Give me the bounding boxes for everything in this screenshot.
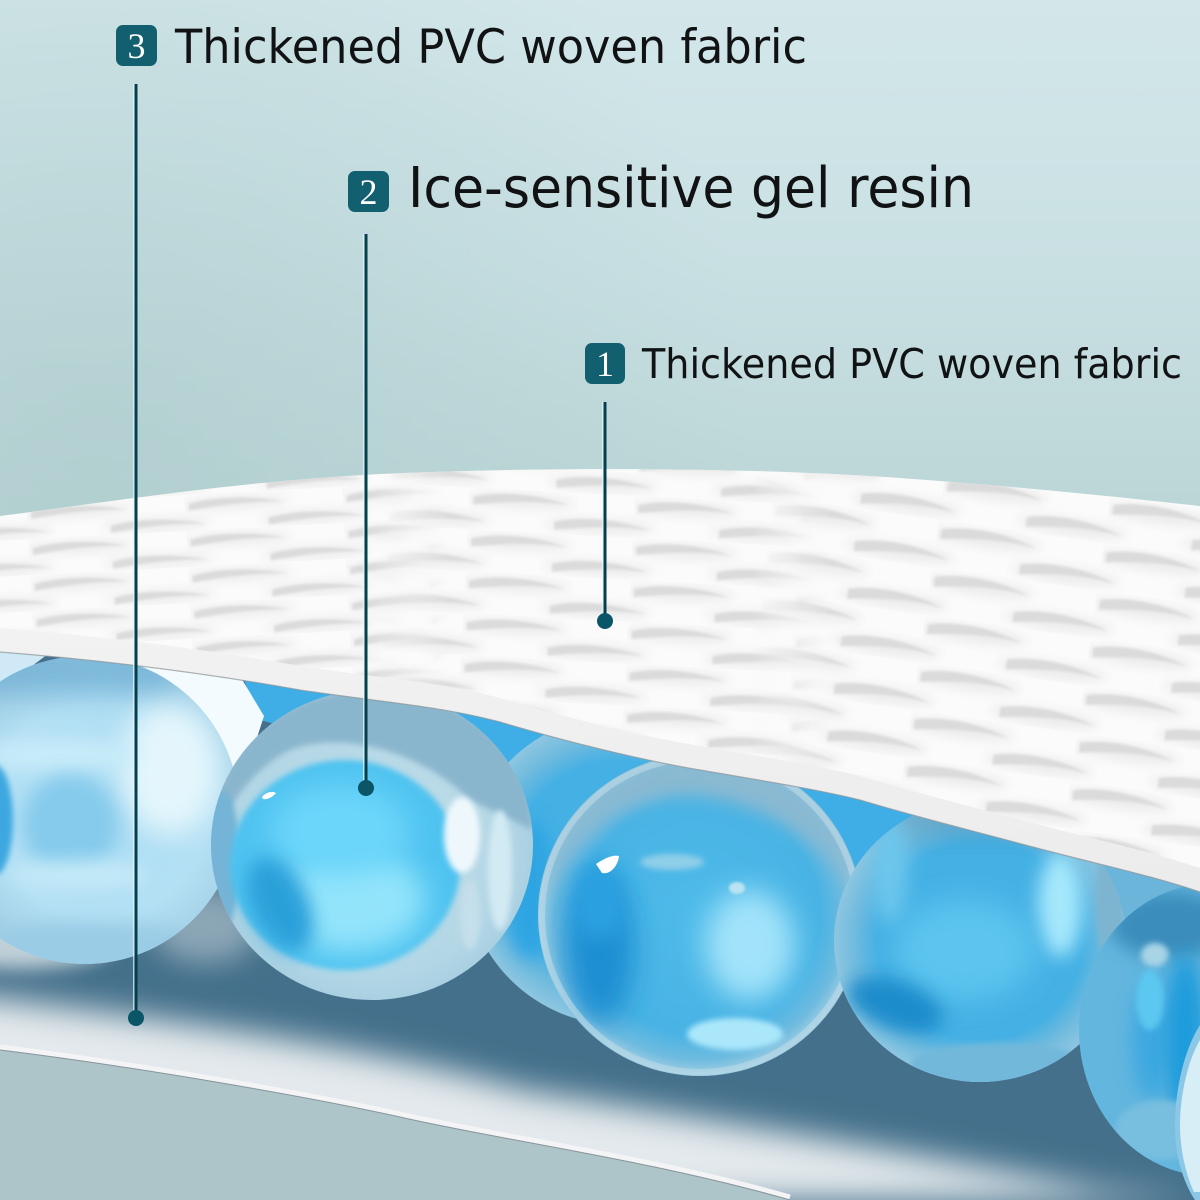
- upper fabric layer: [0, 440, 1200, 900]
- gel bead: far right: [1079, 884, 1200, 1176]
- badge 1: [585, 343, 625, 384]
- badge 2: [348, 171, 389, 212]
- gel bead: right: [834, 816, 1124, 1082]
- leader line 2: [358, 234, 374, 796]
- marker 2: [348, 156, 974, 796]
- shadow floor: [0, 640, 1200, 1200]
- label 2: Ice-sensitive gel resin: [408, 156, 974, 221]
- gel bead: cut off corner: [1175, 1025, 1200, 1200]
- gel bead: rear centre: [488, 734, 651, 1019]
- blue background fill behind beads: [0, 645, 1200, 960]
- badge 3: 3: [128, 26, 146, 66]
- front edge: [0, 620, 1200, 892]
- gel bead: pale left: [0, 658, 233, 964]
- leader line 3: [128, 84, 144, 1026]
- label 3: Thickened PVC woven fabric: [174, 20, 807, 75]
- gel bead: front centre: [538, 754, 862, 1076]
- gel bead: marker 2: [204, 690, 533, 1000]
- badge 2: 2: [360, 172, 378, 212]
- badge 3: [116, 25, 157, 66]
- lower fabric layer: [0, 640, 1200, 1200]
- leader line 1: [597, 402, 613, 629]
- marker 1: [585, 340, 1182, 629]
- woven top face: [0, 469, 1200, 868]
- white fabric band: [0, 992, 1200, 1200]
- marker 3: [116, 20, 807, 1026]
- badge 1: 1: [596, 344, 614, 384]
- area below band: [0, 1050, 790, 1200]
